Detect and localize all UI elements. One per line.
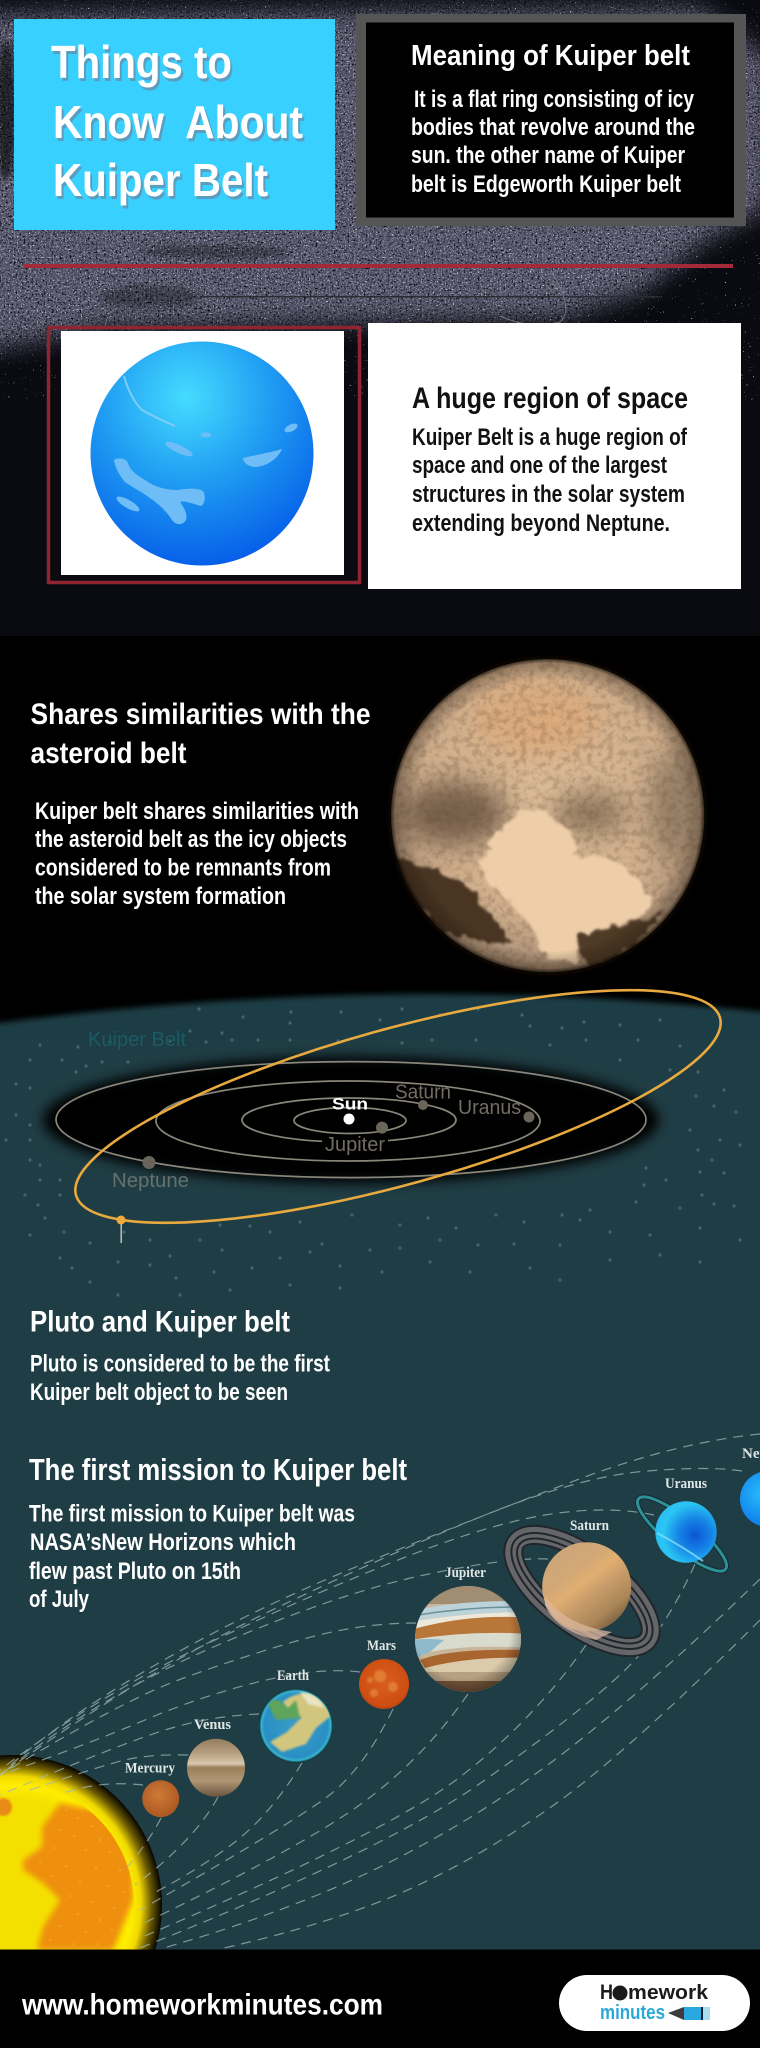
black solar system disc: [43, 1057, 659, 1183]
body: Pluto and Kuiper belt: [30, 1351, 330, 1406]
planet: Venus: [187, 1717, 245, 1797]
body: shares similarities: considered to be remnants from: [35, 854, 331, 882]
heading: first mission: The first mission to Kuiper belt: [29, 1452, 407, 1487]
icon: pencil: [668, 2007, 710, 2020]
body: meaning: sun. the other name of Kuiper: [411, 142, 685, 169]
title text: Know About: [53, 96, 303, 148]
heading: Pluto and Kuiper belt: Pluto and Kuiper belt: [30, 1305, 290, 1338]
body: Pluto and Kuiper belt: Pluto is considered to be the first: [30, 1351, 330, 1378]
illustration: Pluto: [388, 656, 707, 975]
icon: clock: [612, 1986, 628, 2000]
body: shares similarities: Kuiper belt shares similarities with: [35, 798, 359, 825]
body: first mission: flew past Pluto on 15th: [29, 1558, 241, 1585]
background: teal Kuiper region: [0, 994, 760, 1060]
body: first mission: NASA’sNew Horizons which: [30, 1529, 296, 1556]
title panel: [14, 19, 335, 230]
planet: Jupiter: [415, 1566, 521, 1692]
planet: Saturn: Saturn: [570, 1518, 610, 1534]
body: huge region: extending beyond Neptune.: [412, 510, 670, 537]
footer bar: [0, 1950, 760, 2048]
title text: Things to: [51, 36, 232, 88]
logo: H: [600, 1981, 613, 2004]
illustration: Kuiper belt orbit diagram: [6, 943, 741, 1295]
body: meaning: bodies that revolve around the: [411, 114, 695, 141]
body: huge region: space and one of the largest: [412, 452, 667, 479]
heading: shares similarities: [30, 698, 370, 770]
title text: [51, 36, 303, 206]
planet: Mercury: Mercury: [125, 1761, 175, 1777]
Neptune marker: [112, 1156, 189, 1192]
heading: huge region: A huge region of space: [412, 382, 688, 415]
logo: [559, 1975, 750, 2031]
heading: shares similarities: Shares similarities with the: [30, 698, 370, 731]
planet: Jupiter: Jupiter: [445, 1565, 486, 1581]
body: huge region: structures in the solar system: [412, 481, 685, 508]
planetary orbits: [56, 1062, 646, 1178]
red divider: [24, 264, 733, 268]
body: meaning: belt is Edgeworth Kuiper belt: [411, 171, 681, 198]
planet: Earth: Earth: [277, 1668, 310, 1684]
panel: blue planet image: [48, 328, 360, 582]
body: first mission: The first mission to Kuiper belt was: [29, 1500, 355, 1528]
logo: mework: [628, 1982, 709, 2004]
body: Pluto and Kuiper belt: Kuiper belt object to be seen: [30, 1379, 288, 1406]
body: shares similarities: [35, 798, 359, 910]
background: milky way band: [0, 0, 760, 400]
planet: Mars: Mars: [367, 1638, 396, 1654]
Uranus marker: Uranus: [458, 1097, 521, 1119]
sun dot and label: Sun: [332, 1094, 368, 1114]
planet: Venus: Venus: [194, 1717, 231, 1733]
planet: Mercury: [125, 1761, 179, 1817]
body: first mission: of July: [29, 1586, 90, 1613]
body: shares similarities: the asteroid belt as the icy objects: [35, 826, 347, 853]
icon: blue planet: [90, 342, 314, 566]
body: meaning: It is a flat ring consisting of icy: [414, 86, 695, 113]
Pluto orbit: [55, 943, 741, 1270]
background: dark space: [0, 0, 760, 636]
planet: Uranus: Uranus: [665, 1476, 707, 1492]
panel: meaning of Kuiper belt: [356, 14, 746, 226]
heading: shares similarities: asteroid belt: [30, 737, 187, 770]
Kuiper Belt label: Kuiper Belt: [88, 1029, 186, 1051]
planet: Mars: [359, 1638, 409, 1709]
Jupiter marker: [322, 1122, 388, 1157]
body: huge region: [412, 424, 688, 537]
background: black band: [0, 636, 760, 1036]
planet: Earth: [259, 1668, 333, 1763]
dashed orbit lines: [0, 1434, 760, 1949]
planet: Saturn: [493, 1512, 671, 1670]
logo: minutes: [600, 2002, 665, 2024]
planet: Uranus: [629, 1476, 735, 1581]
body: meaning: [411, 86, 695, 198]
title text: Kuiper Belt: [53, 154, 268, 206]
website url: www.homeworkminutes.com: [21, 1989, 383, 2022]
body: shares similarities: the solar system formation: [35, 883, 286, 910]
panel: a huge region of space: [368, 323, 741, 589]
Neptune marker: Neptune: [112, 1170, 189, 1192]
Pluto marker: [116, 1216, 126, 1243]
sun dot and label: [332, 1094, 368, 1124]
Saturn marker: Saturn: [395, 1082, 451, 1104]
body: first mission: [29, 1500, 355, 1613]
planet: Neptune: [740, 1446, 760, 1527]
heading: meaning: Meaning of Kuiper belt: [411, 40, 690, 72]
body: huge region: Kuiper Belt is a huge region of: [412, 424, 688, 451]
Jupiter marker: Jupiter: [325, 1134, 385, 1156]
illustration: sun: [0, 1755, 162, 1950]
